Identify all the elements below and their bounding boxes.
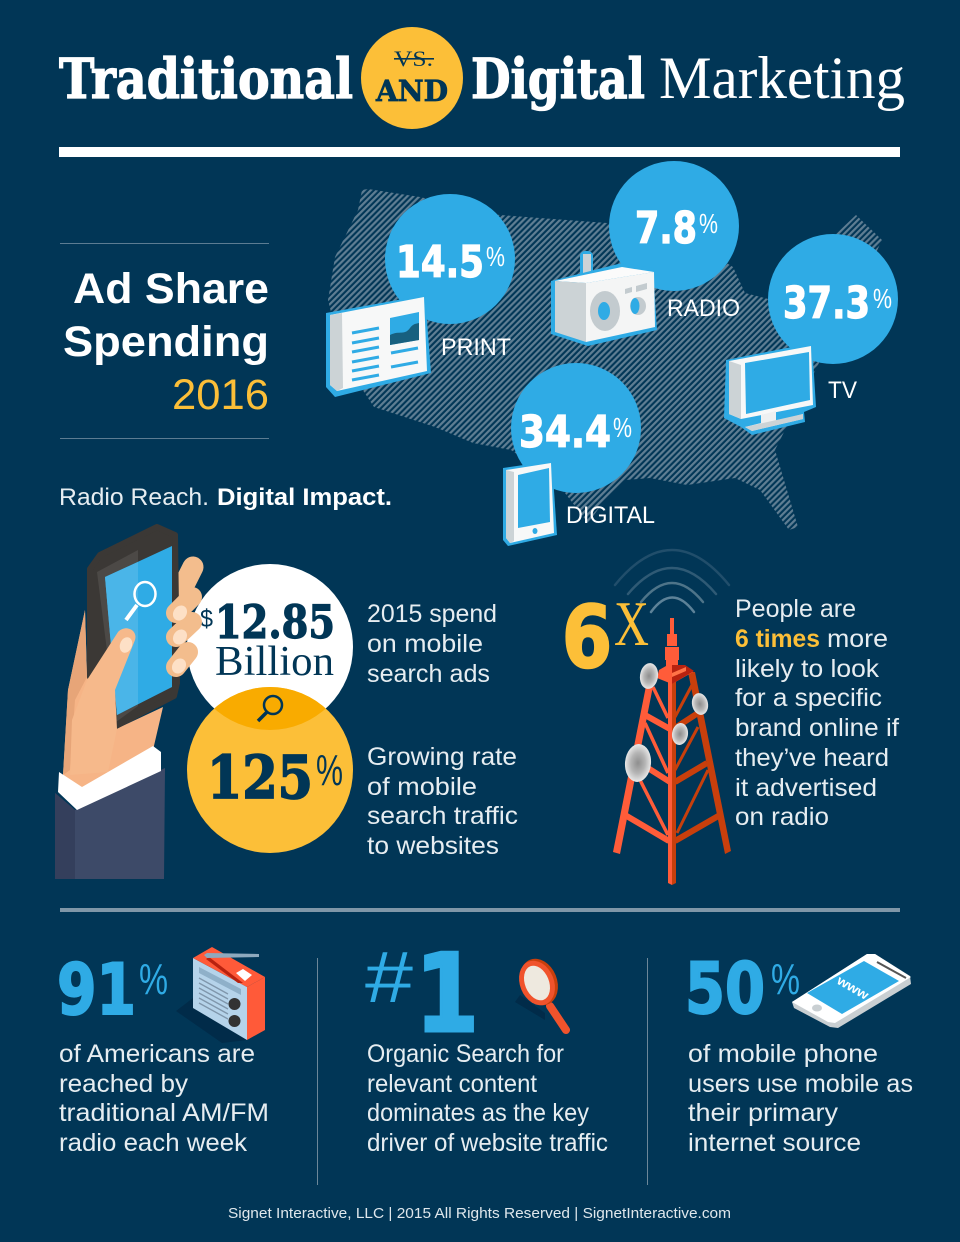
stat panel: 91 percent: 91	[57, 949, 136, 1031]
ad share: radio	[551, 161, 740, 346]
ad share: radio: RADIO	[667, 295, 740, 322]
text: growing rate	[367, 743, 518, 860]
stat circle: 125 percent	[187, 687, 353, 853]
stat circle: 12.85 billion: 12.85	[215, 595, 335, 649]
stat panel: 50 percent: users use mobile as	[688, 1070, 913, 1098]
satellite dishes	[623, 662, 710, 783]
fingers	[176, 597, 192, 667]
ad share: print	[326, 194, 515, 397]
heading: ad share spending	[60, 244, 269, 438]
ad share: print: PRINT	[441, 334, 511, 361]
icon: newspaper	[326, 295, 431, 397]
ad share: radio: %	[699, 208, 718, 239]
stat panel: number 1: 1	[415, 932, 479, 1057]
text: growing rate: search traffic	[367, 802, 518, 830]
illustration: radio tower	[613, 550, 731, 885]
stat panel: number 1: Organic Search for	[367, 1040, 564, 1068]
stat panel: 50 percent: their primary	[688, 1099, 839, 1127]
stat: 6x: X	[614, 589, 649, 659]
cuff	[58, 746, 161, 810]
ad share: print: 14.5	[396, 237, 484, 288]
stat panel: 91 percent: traditional AM/FM	[59, 1099, 269, 1127]
ad share: tv	[724, 234, 898, 435]
vs and badge: VS.	[394, 46, 433, 71]
ad share: radio: 7.8	[635, 203, 697, 254]
text: 6 times: 6 times	[735, 625, 820, 653]
stat panel: 50 percent: internet source	[688, 1129, 861, 1157]
text: growing rate: Growing rate	[367, 743, 517, 771]
section heading: radio reach digital impact: Radio Reach.	[59, 484, 209, 511]
ad share: digital: DIGITAL	[566, 502, 655, 529]
title: Marketing	[659, 45, 905, 111]
icon: small magnifier	[258, 696, 282, 721]
stat panel: 50 percent	[685, 948, 913, 1157]
text: 6 times	[735, 595, 899, 831]
vs and badge: AND	[375, 74, 448, 108]
heading: ad share spending: Spending	[63, 318, 269, 366]
icon: tablet	[503, 461, 557, 546]
ad share: print: %	[486, 241, 505, 272]
stat panel: 50 percent: 50	[685, 948, 765, 1030]
stat panel: 91 percent: reached by	[59, 1070, 189, 1098]
stat panel: number 1: dominates as the key	[367, 1099, 589, 1127]
heading: ad share spending: Ad Share	[73, 265, 269, 313]
sleeve	[55, 768, 165, 879]
heading: ad share spending: 2016	[172, 371, 269, 419]
stat panel: 91 percent: %	[139, 955, 168, 1004]
section heading bold part: Digital Impact.	[217, 484, 392, 511]
ad share: tv: TV	[828, 377, 857, 404]
icon: tv	[724, 343, 816, 435]
text: 6 times: likely to look	[735, 655, 880, 683]
stat panel: 91 percent: of Americans are	[59, 1040, 255, 1068]
stat circle: 12.85 billion	[187, 564, 353, 730]
stat panel: 50 percent: %	[771, 955, 800, 1004]
text: growing rate: of mobile	[367, 773, 477, 801]
text: 2015 spend: 2015 spend	[367, 600, 497, 628]
ad share: tv: %	[873, 283, 892, 314]
text: 6 times: they’ve heard	[735, 744, 889, 772]
palm	[63, 610, 163, 790]
text: 6 times: brand online if	[735, 714, 899, 742]
stat: 6x: 6	[562, 588, 612, 688]
illustration: hand holding phone	[55, 527, 193, 879]
stat panel: number 1: #	[365, 938, 413, 1018]
text: 6 times: more	[827, 625, 888, 653]
vs and badge	[361, 27, 463, 129]
icon: portable radio	[176, 947, 265, 1043]
stat panel: number 1: driver of website traffic	[367, 1129, 608, 1157]
phone body	[90, 527, 177, 726]
stat panel: 91 percent: radio each week	[59, 1129, 248, 1157]
stat circle: 125 percent: 125	[207, 743, 313, 812]
ad share: digital: 34.4	[519, 407, 611, 458]
icon: smartphone	[792, 954, 911, 1028]
stat circle: 12.85 billion: $	[200, 605, 213, 633]
stat circle: 125 percent: %	[316, 746, 343, 795]
text: growing rate: to websites	[367, 832, 499, 860]
hatched US map	[328, 189, 882, 530]
ad share: tv: 37.3	[783, 278, 870, 329]
text: 2015 spend: search ads	[367, 660, 490, 688]
title: Traditional	[59, 46, 353, 111]
text: 2015 spend: on mobile	[367, 630, 483, 658]
text: 2015 spend	[367, 600, 497, 688]
ad share: digital: %	[613, 412, 632, 443]
phone screen	[105, 546, 172, 715]
text: 6 times: it advertised	[735, 774, 877, 802]
icon: radio	[551, 251, 657, 346]
stat panel: 50 percent: of mobile phone	[688, 1040, 878, 1068]
title: Digital	[471, 46, 645, 111]
text: 6 times: for a specific	[735, 684, 882, 712]
footer: Signet Interactive, LLC | 2015 All Rights Reserved | SignetInteractive.com	[228, 1206, 731, 1222]
title	[59, 27, 905, 129]
thumb	[70, 628, 135, 775]
text: 6 times: People are	[735, 595, 856, 623]
icon: magnifying glass	[513, 953, 566, 1030]
ad share: digital	[503, 363, 655, 546]
stat: 6x	[562, 588, 649, 688]
icon: smartphone: www	[834, 972, 872, 1003]
stat panel: 91 percent	[57, 947, 269, 1157]
stat circle: 12.85 billion: Billion	[215, 639, 334, 685]
stat panel: number 1: relevant content	[367, 1070, 537, 1098]
stat panel: number 1	[365, 932, 608, 1157]
back fingers	[183, 567, 193, 587]
text: 6 times: on radio	[735, 803, 829, 831]
signal waves	[615, 550, 729, 612]
